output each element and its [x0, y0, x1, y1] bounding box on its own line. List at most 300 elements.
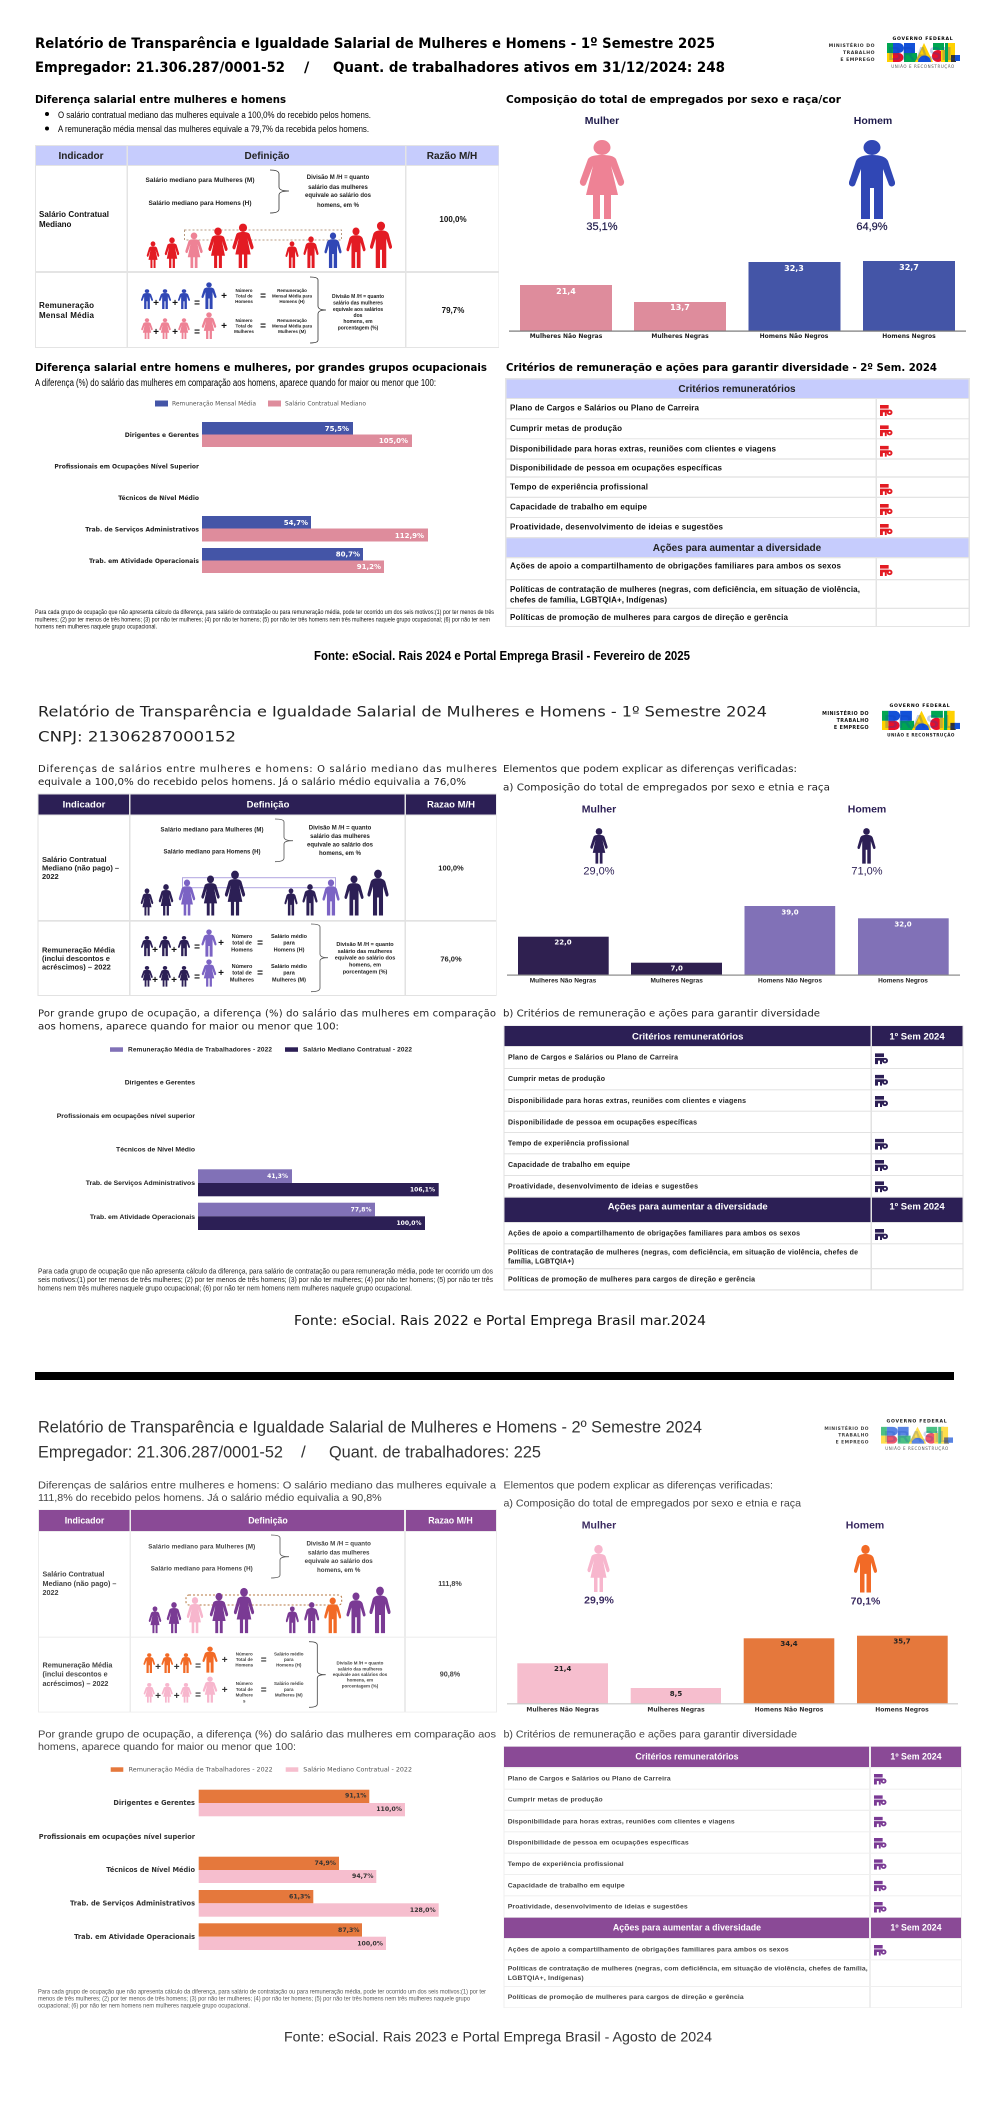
definition: salário contratual mediano: Salário mediano para Homens (H) [148, 200, 252, 207]
bar chart: grupos de ocupação [39, 1766, 439, 1950]
logo: governo federal: UNIÃO E RECONSTRUÇÃO [891, 64, 955, 69]
definition: remuneração mensal média: + [153, 298, 159, 309]
definition: remuneração mensal média: Remuneração [277, 288, 307, 293]
definition: salário contratual mediano: Divisão M /H = quanto [309, 826, 372, 832]
table: indicadores: Salário Contratual [39, 210, 109, 219]
definition: remuneração média: salário das mulheres [338, 949, 392, 955]
table: critérios: 1º Sem 2024 [889, 1201, 945, 1212]
definition: remuneração média: Mulheres [230, 978, 254, 984]
table: indicadores: Razão M/H [427, 151, 477, 162]
table: critérios: Políticas de contratação de mulheres (negras, com deficiência, em situação de violência, [510, 585, 860, 594]
bar chart: grupos de ocupação: Trab. de Serviços Administrativos [70, 1900, 195, 1908]
bar chart: grupos de ocupação: 110,0% [376, 1806, 402, 1813]
definition: remuneração média: = [195, 1690, 201, 1701]
footnote: menos de três mulheres; (2) por ter menos de três homens; (3) por não ter mulheres; (4) por não ter homens; (5) por não ter três homens nem três mulheres naquele grupo [38, 1996, 471, 2002]
intro paragraph: Diferenças de salários entre mulheres e homens: O salário mediano das mulheres equivale a [38, 1479, 496, 1491]
definition: remuneração média: = [194, 972, 200, 983]
table: indicadores: Indicador [63, 800, 106, 811]
definition: remuneração média: + [222, 1655, 228, 1666]
logo: governo federal: TRABALHO [837, 718, 869, 724]
title: Empregador: 21.306.287/0001-52 [38, 1442, 283, 1461]
definition: remuneração mensal média: equivale aos salários [333, 307, 383, 313]
definition: remuneração média: + [152, 975, 158, 986]
sex composition icons: 71,0% [851, 866, 883, 878]
definition: salário contratual mediano: homens, em % [319, 851, 362, 857]
definition: remuneração mensal média: Remuneração [277, 318, 307, 323]
bar chart: composição: 39,0 [781, 908, 799, 916]
bar chart: composição: Homens Não Negros [760, 333, 829, 340]
bar chart: grupos de ocupação: Remuneração Média de Trabalhadores - 2022 [128, 1046, 272, 1054]
title: Quant. de trabalhadores: 225 [329, 1442, 541, 1461]
logo: governo federal: E EMPREGO [840, 57, 875, 63]
table: indicadores: Salário Contratual [42, 1570, 104, 1579]
definition: remuneração média: para [283, 971, 296, 977]
definition: salário contratual mediano: salário das mulheres [310, 834, 371, 840]
table: critérios: Critérios remuneratórios [678, 384, 796, 395]
definition: salário contratual mediano: Salário mediano para Mulheres (M) [146, 177, 254, 184]
definition: remuneração média: total de [232, 971, 252, 977]
bar chart: composição: 7,0 [670, 965, 683, 973]
footnote: ocupacional; (6) por não ter nem homens nem mulheres naquele grupo ocupacional. [38, 2002, 250, 2010]
bar chart: composição [509, 261, 966, 340]
bar chart: grupos de ocupação: Salário Mediano Contratual - 2022 [303, 1046, 412, 1054]
table: critérios: LGBTQIA+, Indígenas) [508, 1975, 584, 1982]
bar chart: grupos de ocupação: Remuneração Média de Trabalhadores - 2022 [129, 1766, 273, 1774]
definition: remuneração média: + [174, 1662, 180, 1673]
explanation text: a) Composição do total de empregados por sexo e etnia e raça [504, 1498, 801, 1510]
bar chart: grupos ocupacionais: Profissionais em Ocupações Nível Superior [54, 464, 199, 470]
definition: salário contratual mediano: Salário mediano para Mulheres (M) [160, 828, 264, 834]
definition: remuneração média: s [243, 1698, 246, 1704]
occupational text [38, 1008, 496, 1032]
bar chart: composição: 21,4 [554, 1665, 571, 1673]
bar chart: composição: Homens Negros [878, 977, 928, 984]
logo: governo federal: BRASIL [888, 44, 958, 64]
table: indicadores: Indicador [58, 151, 104, 162]
intro paragraph [38, 763, 497, 788]
definition: remuneração média: Homens (H) [274, 948, 305, 954]
sex composition icons [580, 115, 895, 233]
source: Fonte: eSocial. Rais 2022 e Portal Emprega Brasil mar.2024 [294, 1314, 706, 1329]
definition: remuneração média: Salário médio [271, 934, 308, 940]
sex composition icons: 70,1% [851, 1596, 881, 1608]
table: indicadores: Razao M/H [428, 1516, 473, 1526]
definition: remuneração mensal média: + [221, 321, 227, 332]
bullet list [45, 110, 371, 135]
table: critérios: Políticas de promoção de mulheres para cargos de direção e gerência [508, 1994, 744, 2001]
table: critérios: Ações de apoio a compartilhamento de obrigações familiares para ambos os sexos [508, 1230, 800, 1237]
table: indicadores: Definição [247, 800, 290, 811]
table: indicadores: 100,0% [439, 215, 467, 224]
table: critérios: família, LGBTQIA+) [508, 1258, 574, 1265]
sex composition icons [582, 804, 886, 878]
table: indicadores [38, 794, 496, 996]
bullet list: O salário contratual mediano das mulheres equivale a 100,0% do recebido pelos homens. [58, 110, 371, 121]
definition: remuneração média: = [194, 942, 200, 953]
footnote: homens nem três mulheres naquele grupo ocupacional; (6) por não ter nem homens nem mulheres naquele grupo ocupacional. [38, 1286, 412, 1293]
definition: remuneração mensal média: + [153, 327, 159, 338]
bar chart: grupos de ocupação: 100,0% [357, 1940, 383, 1948]
table: indicadores: acréscimos) – 2022 [42, 962, 111, 971]
bar chart: grupos de ocupação: 106,1% [410, 1186, 435, 1194]
definition: remuneração mensal média: Mulheres [234, 329, 254, 334]
report section: 2º Semestre 2024 [38, 1417, 962, 2045]
bar chart: grupos de ocupação: Trab. em Atividade Operacionais [90, 1214, 195, 1221]
definition: salário contratual mediano: Divisão M /H = quanto [307, 175, 370, 181]
bar chart: grupos ocupacionais: 112,9% [395, 532, 424, 540]
intro paragraph [38, 1479, 496, 1504]
table: critérios: Cumprir metas de produção [508, 1797, 603, 1804]
definition: remuneração média: + [171, 945, 177, 956]
logo: governo federal: MINISTÉRIO DO [824, 1424, 869, 1432]
definition: remuneração média: + [155, 1691, 161, 1702]
explanation text: a) Composição do total de empregados por sexo e etnia e raça [503, 783, 830, 794]
definition: remuneração média: + [218, 938, 224, 949]
logo: governo federal: BRASIL [884, 1429, 950, 1446]
bar chart: grupos de ocupação: Trab. em Atividade Operacionais [74, 1933, 195, 1941]
table: critérios: Plano de Cargos e Salários ou Plano de Carreira [508, 1055, 678, 1062]
definition: salário contratual mediano: homens, em % [317, 203, 360, 209]
definition: remuneração média: = [257, 938, 263, 949]
definition: remuneração mensal média: Número [235, 318, 253, 323]
logo: governo federal: E EMPREGO [836, 1440, 869, 1446]
logo: governo federal: GOVERNO FEDERAL [887, 1419, 947, 1425]
table: indicadores: (inclui descontos e [42, 954, 110, 963]
bar chart: grupos de ocupação: 74,9% [315, 1860, 336, 1867]
report section: 1º Semestre 2024 [38, 703, 964, 1329]
definition: remuneração mensal média: Mulheres (M) [278, 329, 306, 334]
footnote: seis motivos:(1) por ter menos de três mulheres; (2) por ter menos de três homens; (3) por não ter mulheres; (4) por não ter homens; (5) por não ter três [38, 1277, 493, 1284]
bar chart: composição [507, 1636, 958, 1713]
logo: governo federal: MINISTÉRIO DO [822, 709, 869, 717]
title [35, 36, 725, 76]
definition: remuneração média: + [171, 975, 177, 986]
bar chart: composição: 32,3 [784, 264, 804, 273]
bar chart: grupos de ocupação: Profissionais em ocupações nível superior [39, 1833, 196, 1841]
sex composition icons: 29,9% [584, 1595, 615, 1607]
title: / [304, 60, 310, 76]
definition: remuneração mensal média: = [260, 321, 266, 332]
definition: remuneração média: porcentagem (%) [342, 1684, 379, 1688]
table: indicadores: Mediano [39, 220, 72, 229]
occupational text: Por grande grupo de ocupação, a diferença (%) do salário das mulheres em comparação aos [38, 1729, 496, 1741]
bar chart: grupos de ocupação: Salário Mediano Contratual - 2022 [303, 1766, 412, 1774]
footnote: Para cada grupo de ocupação que não apresenta cálculo da diferença, para salário de contratação ou para remuneração média, pode ter ocorrido um dos seis motivos:(1) por ter [38, 1988, 486, 1995]
table: indicadores: 79,7% [442, 306, 464, 315]
definition: remuneração mensal média: Homens (H) [279, 299, 305, 304]
definition: remuneração média: = [261, 1655, 267, 1666]
bar chart: composição: 22,0 [554, 938, 572, 946]
table: indicadores [35, 145, 499, 348]
table: critérios: Critérios remuneratórios [632, 1031, 743, 1042]
definition: remuneração média: Mulheres (M) [272, 978, 306, 984]
intro paragraph: equivale a 100,0% do recebido pelos homens. Já o salário médio equivalia a 76,0% [38, 776, 466, 788]
definition: remuneração mensal média: + [172, 327, 178, 338]
definition: remuneração mensal média: Mensal Média para [272, 324, 313, 328]
bar chart: composição: Mulheres Não Negras [530, 977, 597, 984]
heading: grupos ocupacionais: Diferença salarial entre homens e mulheres, por grandes grupos ocupacionais [35, 361, 487, 374]
definition: remuneração média: Salário médio [274, 1651, 304, 1656]
sex composition icons [582, 1520, 884, 1608]
bar chart: composição: Mulheres Negras [647, 1706, 705, 1713]
definition: remuneração média: para [283, 941, 296, 947]
bar chart: composição: Homens Não Negros [755, 1706, 824, 1713]
table: indicadores: 90,8% [440, 1670, 461, 1679]
definition: remuneração média: equivale ao salário dos [335, 955, 395, 961]
definition: remuneração média [141, 924, 395, 992]
bar chart: grupos de ocupação: 100,0% [396, 1220, 422, 1227]
table: indicadores: Mediano (não pago) – [42, 1579, 116, 1588]
sex composition icons: Mulher [582, 804, 616, 816]
table: critérios: Disponibilidade para horas extras, reuniões com clientes e viagens [508, 1098, 746, 1105]
definition: remuneração média: total de [232, 941, 252, 947]
table: critérios: Plano de Cargos e Salários ou Plano de Carreira [510, 404, 700, 413]
table: critérios [504, 1026, 964, 1290]
definition: remuneração média: Número [232, 964, 253, 970]
definition: remuneração média: + [155, 1662, 161, 1673]
definition: remuneração média: + [222, 1685, 228, 1696]
bar chart: grupos de ocupação: 128,0% [410, 1907, 436, 1914]
intro paragraph: 111,8% do recebido pelos homens. Já o salário médio equivalia a 90,8% [38, 1492, 382, 1504]
table: critérios: 1º Sem 2024 [890, 1922, 942, 1932]
bar chart: grupos ocupacionais: 75,5% [325, 425, 349, 433]
definition: remuneração mensal média: + [221, 291, 227, 302]
bar chart: composição: Mulheres Não Negras [530, 333, 603, 340]
bullet list: A remuneração média mensal das mulheres equivale a 79,7% da recebida pelos homens. [58, 124, 369, 135]
definition: salário contratual mediano: Salário mediano para Homens (H) [151, 1566, 253, 1573]
table: critérios: Ações para aumentar a diversidade [608, 1201, 768, 1212]
table: indicadores: Definição [248, 1516, 288, 1526]
bar chart: composição: Mulheres Negras [651, 333, 709, 340]
sex composition icons: Homem [854, 115, 892, 127]
footnote [38, 1988, 486, 2010]
definition: salário contratual mediano: homens, em % [317, 1567, 361, 1574]
explanation text: Elementos que podem explicar as diferenças verificadas: [503, 764, 797, 775]
bar chart: composição: 35,7 [893, 1638, 911, 1646]
table: indicadores: Remuneração Média [42, 945, 116, 954]
bar chart: grupos de ocupação: 87,3% [338, 1927, 360, 1934]
logo: governo federal: BRASIL [884, 712, 956, 732]
table: indicadores: Remuneração [39, 301, 94, 310]
logo: governo federal [829, 36, 960, 69]
table: critérios: Políticas de contratação de mulheres (negras, com deficiência, em situação de violência, chefes de família, [508, 1966, 868, 1973]
table: indicadores: acréscimos) – 2022 [42, 1679, 108, 1688]
definition: remuneração média [143, 1642, 388, 1707]
heading: composição: Composição do total de empregados por sexo e raça/cor [506, 93, 842, 106]
definition: remuneração média: Mulhere [236, 1693, 253, 1698]
table: critérios: Disponibilidade para horas extras, reuniões com clientes e viagens [508, 1818, 735, 1825]
table: critérios [505, 378, 970, 627]
definition: salário contratual mediano: equivale ao salário dos [307, 843, 374, 849]
logo: governo federal: TRABALHO [838, 1433, 869, 1439]
sex composition icons: Homem [846, 1520, 884, 1532]
definition: remuneração média: Homens [231, 948, 253, 954]
table: critérios: Disponibilidade de pessoa em ocupações específicas [510, 464, 723, 473]
table: indicadores: Mediano (não pago) – [42, 864, 119, 873]
table: indicadores: 111,8% [438, 1579, 462, 1588]
bar chart: grupos de ocupação: Profissionais em ocupações nível superior [57, 1113, 195, 1120]
logo: governo federal [824, 1419, 953, 1451]
table: critérios: Tempo de experiência profissional [508, 1141, 629, 1148]
bar chart: grupos de ocupação: Dirigentes e Gerentes [125, 1080, 195, 1086]
table: indicadores: Mensal Média [39, 311, 95, 320]
title [38, 1417, 702, 1461]
table: critérios: Proatividade, desenvolvimento de ideias e sugestões [510, 523, 724, 532]
occupational text: Por grande grupo de ocupação, a diferença (%) do salário das mulheres em comparação [38, 1008, 496, 1020]
explanation text [503, 764, 830, 794]
definition: remuneração média: + [174, 1691, 180, 1702]
bar chart: composição: Homens Negros [882, 333, 936, 340]
definition: remuneração média: Homens [235, 1663, 254, 1668]
table: critérios: Capacidade de trabalho em equipe [508, 1882, 625, 1889]
table: critérios: Plano de Cargos e Salários ou Plano de Carreira [508, 1775, 671, 1782]
definition: remuneração média: homens, em [349, 962, 381, 968]
bar chart: composição [507, 906, 960, 984]
bar chart: grupos de ocupação: Dirigentes e Gerentes [113, 1799, 195, 1807]
definition: remuneração média: Divisão M /H = quanto [337, 1661, 384, 1666]
table: indicadores: (inclui descontos e [42, 1670, 108, 1679]
definition: remuneração média: salário das mulheres [338, 1666, 383, 1671]
bar chart: grupos de ocupação: 77,8% [351, 1206, 372, 1214]
table: critérios: Capacidade de trabalho em equipe [508, 1162, 630, 1169]
definition: remuneração média: homens, em [347, 1678, 373, 1683]
section divider bar [35, 1372, 954, 1380]
definition: remuneração média: Mulheres (M) [275, 1693, 303, 1698]
logo: governo federal: E EMPREGO [834, 725, 869, 731]
table: critérios: Políticas de contratação de mulheres (negras, com deficiência, em situação de violência, chefes de [508, 1249, 858, 1256]
definition: remuneração média: Salário médio [271, 964, 308, 970]
table: critérios: Disponibilidade de pessoa em ocupações específicas [508, 1840, 689, 1847]
definition: remuneração mensal média: Total de [236, 294, 253, 298]
definition: salário contratual mediano: Divisão M /H = quanto [306, 1541, 371, 1548]
table: critérios: Ações para aumentar a diversidade [653, 543, 822, 554]
sex composition icons: 29,0% [583, 866, 615, 878]
occupational text [38, 1729, 496, 1753]
title: CNPJ: 21306287000152 [38, 730, 236, 746]
bar chart: grupos ocupacionais: Remuneração Mensal Média [172, 400, 256, 408]
title: Empregador: 21.306.287/0001-52 [35, 60, 285, 76]
definition: salário contratual mediano [148, 1535, 391, 1633]
bar chart: grupos de ocupação: 61,3% [289, 1894, 310, 1900]
bar chart: grupos de ocupação: Trab. de Serviços Administrativos [86, 1180, 195, 1187]
definition: remuneração mensal média: Homens [235, 299, 253, 304]
table: critérios: Proatividade, desenvolvimento de ideias e sugestões [508, 1183, 698, 1190]
bar chart: grupos de ocupação: 91,1% [345, 1792, 366, 1800]
logo: governo federal: TRABALHO [843, 50, 875, 56]
definition: salário contratual mediano: Salário mediano para Homens (H) [164, 850, 260, 856]
bar chart: grupos de ocupação: 41,3% [267, 1173, 288, 1180]
definition: remuneração média: equivale aos salários dos [333, 1672, 388, 1677]
heading: critérios: b) Critérios de remuneração e ações para garantir diversidade [504, 1728, 797, 1740]
bar chart: grupos ocupacionais: 54,7% [284, 519, 308, 527]
table: critérios: Capacidade de trabalho em equipe [510, 503, 648, 512]
footnote [35, 609, 495, 631]
table: critérios: Disponibilidade de pessoa em ocupações específicas [508, 1119, 697, 1126]
table: critérios: Tempo de experiência profissional [510, 482, 648, 491]
bar chart: grupos ocupacionais: Salário Contratual Mediano [285, 400, 366, 408]
footnote: Para cada grupo de ocupação que não apresenta cálculo da diferença, para salário de contratação ou para remuneração média, pode ter ocorrido um dos [38, 1268, 493, 1275]
logo: governo federal: GOVERNO FEDERAL [890, 703, 950, 709]
definition: remuneração média: Divisão M /H = quanto [336, 942, 394, 948]
definition: salário contratual mediano [146, 170, 392, 268]
occupational text: homens, aparece quando for maior ou menor que 100: [38, 1741, 296, 1753]
table: indicadores: Salário Contratual [42, 855, 107, 864]
definition: remuneração mensal média: = [260, 291, 266, 302]
bar chart: composição: Mulheres Negras [651, 977, 703, 984]
bar chart: composição: 13,7 [670, 303, 690, 312]
logo: governo federal [822, 703, 960, 737]
definition: remuneração média: + [218, 968, 224, 979]
definition: salário contratual mediano: equivale ao salário dos [305, 1558, 373, 1565]
definition: remuneração média: + [152, 945, 158, 956]
definition: salário contratual mediano: Salário mediano para Mulheres (M) [148, 1543, 255, 1550]
table: critérios: 1º Sem 2024 [889, 1031, 945, 1042]
table: critérios: Políticas de promoção de mulheres para cargos de direção e gerência [510, 613, 789, 622]
table: indicadores: Indicador [65, 1516, 105, 1526]
table: indicadores: 76,0% [440, 954, 462, 963]
table: critérios: Ações de apoio a compartilhamento de obrigações familiares para ambos os sexos [510, 562, 842, 571]
table: critérios: Políticas de promoção de mulheres para cargos de direção e gerência [508, 1276, 755, 1283]
definition: remuneração média: = [261, 1685, 267, 1696]
definition: remuneração mensal média: Total de [236, 324, 253, 328]
definition: remuneração média: Número [236, 1651, 253, 1656]
bar chart: grupos ocupacionais: 105,0% [379, 437, 408, 445]
heading: critérios: Critérios de remuneração e ações para garantir diversidade - 2º Sem. 2024 [506, 361, 937, 374]
table: critérios: Cumprir metas de produção [508, 1076, 605, 1083]
explanation text: Elementos que podem explicar as diferenças verificadas: [504, 1479, 773, 1491]
definition: remuneração média: = [257, 968, 263, 979]
bar chart: composição: Homens Negros [875, 1706, 929, 1713]
bar chart: grupos ocupacionais [54, 400, 428, 573]
definition: remuneração média: = [195, 1661, 201, 1672]
footnote: mulheres; (2) por ter menos de três homens; (3) por não ter mulheres; (4) por não ter homens; (5) por não ter três homens nem três mulheres naquele grupo ocupacional; (6) por não ter nem [35, 616, 490, 624]
table: critérios: Cumprir metas de produção [510, 424, 622, 433]
definition: remuneração média: Total de [236, 1687, 253, 1692]
sex composition icons: Mulher [582, 1520, 616, 1532]
logo: governo federal: GOVERNO FEDERAL [893, 36, 953, 42]
table: critérios: Disponibilidade para horas extras, reuniões com clientes e viagens [510, 444, 777, 453]
definition: remuneração média: Salário médio [274, 1681, 304, 1686]
source: Fonte: eSocial. Rais 2023 e Portal Emprega Brasil - Agosto de 2024 [284, 2029, 712, 2045]
definition: remuneração mensal média: Divisão M /H = quanto [332, 294, 384, 300]
bar chart: grupos ocupacionais: Dirigentes e Gerentes [125, 432, 199, 439]
title: Relatório de Transparência e Igualdade Salarial de Mulheres e Homens - 1º Semestre 2025 [35, 36, 715, 52]
table: indicadores: 2022 [42, 1588, 58, 1597]
bar chart: composição: 8,5 [670, 1690, 682, 1698]
table: indicadores: 2022 [42, 872, 59, 881]
table: indicadores [38, 1510, 497, 1712]
explanation text [504, 1479, 801, 1510]
intro paragraph: Diferenças de salários entre mulheres e homens: O salário mediano das mulheres [38, 763, 497, 775]
definition: remuneração mensal média: porcentagem (%) [338, 326, 379, 332]
definition: salário contratual mediano: salário das mulheres [308, 1549, 370, 1556]
definition: remuneração mensal média: salário das mulheres [333, 300, 383, 306]
subtitle: A diferença (%) do salário das mulheres em comparação aos homens, aparece quando for maior ou menor que 100: [35, 378, 436, 389]
bar chart: grupos de ocupação: 94,7% [352, 1873, 374, 1880]
definition: remuneração mensal média: = [194, 327, 200, 338]
definition: remuneração média: Total de [236, 1657, 253, 1662]
occupational text: aos homens, aparece quando for maior ou menor que 100: [38, 1021, 339, 1032]
bar chart: grupos ocupacionais: Técnicos de Nível Médio [118, 495, 199, 502]
sex composition icons: 64,9% [856, 221, 888, 233]
bar chart: grupos de ocupação: Técnicos de Nível Médio [106, 1866, 195, 1874]
bar chart: grupos ocupacionais: 91,2% [357, 563, 381, 571]
definition: remuneração média: para [284, 1687, 294, 1692]
sex composition icons: Homem [848, 804, 886, 816]
table: indicadores: Razao M/H [427, 800, 475, 811]
definition: remuneração média: Número [236, 1681, 253, 1686]
footnote [38, 1268, 493, 1293]
